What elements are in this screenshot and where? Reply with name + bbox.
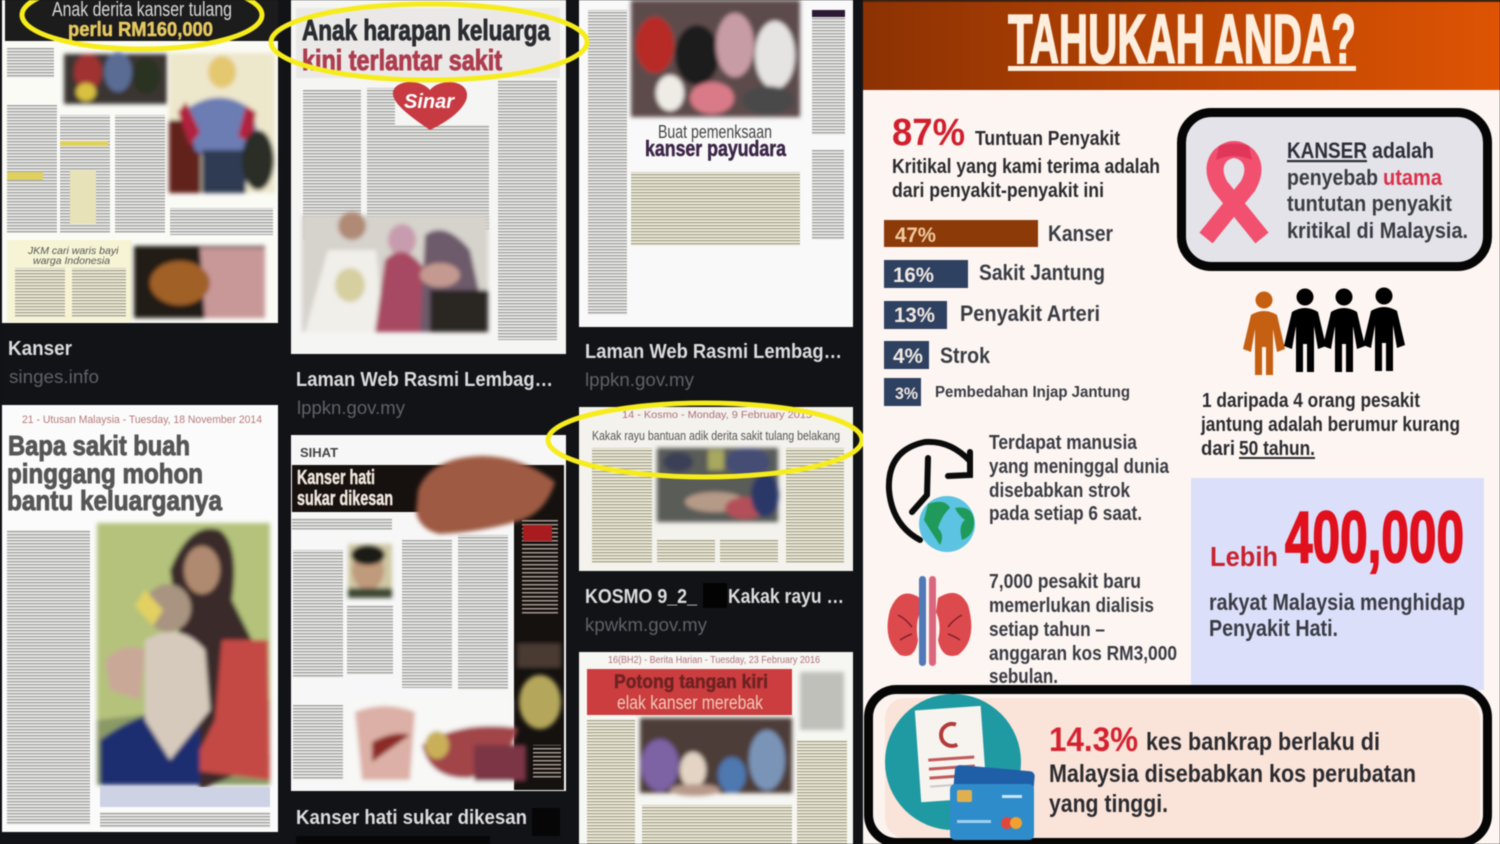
article text columns <box>588 10 845 315</box>
callout: bankruptcy <box>868 690 1488 842</box>
article text columns <box>292 518 508 780</box>
stat: 1 in 4 <box>1200 390 1460 460</box>
text: stroke fact: disebabkan strok <box>989 480 1131 502</box>
bar chart: critical illness claims <box>884 220 1130 406</box>
caption: Kosmo <box>585 583 844 635</box>
headline: kini terlantar sakit <box>302 45 502 77</box>
caption: Kanser <box>8 338 99 387</box>
headline band: sukar dikesan <box>297 488 393 510</box>
article text columns <box>7 48 273 235</box>
callout text: kes bankrap berlaku di <box>1146 728 1380 756</box>
headline: Buat pemenksaan <box>658 122 772 142</box>
callout text <box>1049 721 1416 818</box>
bar: Pembedahan Injap Jantung 3%: Pembedahan Injap Jantung <box>935 384 1130 401</box>
bar: Penyakit Arteri 13%: 13% <box>894 304 935 327</box>
bar: Pembedahan Injap Jantung 3% <box>884 378 1130 406</box>
logo: Sinar heart <box>393 82 467 130</box>
bar: Sakit Jantung 16%: Sakit Jantung <box>979 260 1105 285</box>
caption: Laman Web 2: lppkn.gov.my <box>585 370 694 390</box>
text: stroke fact: pada setiap 6 saat. <box>989 503 1142 525</box>
panel: newspaper card Kanser <box>2 0 278 323</box>
photo: hospital <box>657 448 779 522</box>
stat: 1 in 4: jantung adalah berumur kurang <box>1200 414 1460 436</box>
callout text: penyebab <box>1287 165 1378 190</box>
bar: Strok 4%: 4% <box>893 345 923 368</box>
bar: Kanser 47% <box>884 220 1113 247</box>
article text columns <box>303 80 557 340</box>
photo: family <box>64 52 167 104</box>
bar: Kanser 47%: 47% <box>895 224 936 247</box>
stat: 1 in 4: dari <box>1201 438 1235 460</box>
date line: 14 - Kosmo - Monday, 9 February 2015 <box>622 409 812 421</box>
icon: kidneys <box>888 576 971 666</box>
photo: group <box>631 0 800 117</box>
article text columns <box>592 448 844 563</box>
text: dialysis fact: 7,000 pesakit baru <box>989 571 1141 593</box>
photo caption <box>100 787 270 807</box>
bar: Pembedahan Injap Jantung 3%: 3% <box>895 384 918 403</box>
headline: Bapa sakit buah <box>8 430 190 461</box>
panel: newspaper card Kanser hati <box>291 435 566 791</box>
callout text: KANSER <box>1287 138 1367 163</box>
panel: liver disease stat: Penyakit Hati. <box>1209 615 1338 641</box>
callout text: tuntutan penyakit <box>1287 191 1453 216</box>
bar: Sakit Jantung 16% <box>884 260 1105 288</box>
stat: 87 percent: Tuntuan Penyakit <box>975 128 1120 150</box>
headline band <box>5 0 278 41</box>
headline band <box>292 465 560 512</box>
photo: child <box>169 53 275 193</box>
callout text: Malaysia disebabkan kos perubatan <box>1049 760 1416 788</box>
caption: Laman Web 1: lppkn.gov.my <box>297 398 405 418</box>
bar: Kanser 47%: Kanser <box>1048 221 1113 246</box>
panel: newspaper card Anak harapan <box>291 0 566 354</box>
callout: Kanser penyebab utama <box>1182 112 1488 266</box>
caption: Kosmo: kpwkm.gov.my <box>585 615 707 635</box>
callout text: 14.3% <box>1049 721 1138 759</box>
stat: 1 in 4: 1 daripada 4 orang pesakit <box>1202 390 1420 412</box>
icon: four people <box>1243 288 1405 375</box>
photo: group <box>640 718 792 796</box>
photo: family <box>302 212 488 332</box>
date line: 21 - Utusan Malaysia - Tuesday, 18 November 2014 <box>22 414 262 426</box>
headline band <box>587 669 792 715</box>
headline band: Kanser hati <box>297 467 375 489</box>
photo: portrait <box>348 544 392 598</box>
callout: yellow circle Kosmo <box>548 403 862 477</box>
panel: newspaper card Kosmo <box>579 407 853 571</box>
text: dialysis fact <box>989 571 1177 688</box>
icon: cancer ribbon <box>1206 144 1262 238</box>
caption: Laman Web 2: Laman Web Rasmi Lembag… <box>585 341 842 363</box>
headline: Kakak rayu bantuan adik derita sakit tulang belakang <box>592 429 840 443</box>
stat: 1 in 4: 50 tahun. <box>1239 438 1315 460</box>
bottom section: JKM cari waris bayi <box>27 245 119 257</box>
callout text: yang tinggi. <box>1049 790 1168 818</box>
panel: liver disease stat: Lebih <box>1210 541 1278 572</box>
panel: Tahukah Anda infographic <box>863 0 1500 844</box>
callout: yellow circle RM160,000 <box>22 0 262 49</box>
headline: bantu keluarganya <box>7 485 222 516</box>
icon: clock and globe <box>889 442 975 552</box>
logo: Sinar heart: Sinar <box>404 91 455 113</box>
caption: Kosmo: Kakak rayu … <box>728 586 844 608</box>
panel: newspaper card kanser payudara <box>579 0 853 327</box>
bottom section: warga Indonesia <box>33 255 110 267</box>
bar: Strok 4% <box>884 341 991 369</box>
caption: Kanser hati: Kanser hati sukar dikesan <box>296 807 527 829</box>
illustration: liver <box>416 456 555 534</box>
headline <box>645 122 787 161</box>
bar: Penyakit Arteri 13%: Penyakit Arteri <box>960 301 1100 326</box>
right black column <box>514 465 564 790</box>
bottom section <box>7 240 132 322</box>
callout text: kritikal di Malaysia. <box>1287 218 1468 243</box>
caption: Laman Web 2 <box>585 341 842 390</box>
article text columns <box>587 672 847 844</box>
stat: 87 percent: Kritikal yang kami terima adalah <box>892 156 1160 178</box>
caption: Kosmo: KOSMO 9_2_ <box>585 586 698 608</box>
stat: 87 percent <box>892 112 1160 202</box>
panel: liver disease stat: rakyat Malaysia menghidap <box>1209 589 1465 615</box>
caption: Kanser: Kanser <box>8 338 72 360</box>
caption: Kanser: singes.info <box>9 367 99 387</box>
headline band: elak kanser merebak <box>617 693 763 714</box>
text: dialysis fact: setiap tahun – <box>989 619 1105 641</box>
photo: infant <box>134 246 265 318</box>
icon: medical bill and credit card <box>885 694 1035 840</box>
caption: Kanser hati <box>296 807 560 844</box>
bar: Sakit Jantung 16%: 16% <box>893 264 934 287</box>
headline band: perlu RM160,000 <box>68 19 213 41</box>
caption: Laman Web 1 <box>296 369 553 418</box>
headline <box>7 430 222 516</box>
text: dialysis fact: sebulan. <box>989 666 1058 688</box>
article text column <box>7 530 270 828</box>
photo: mother and child <box>97 523 270 790</box>
stat: 87 percent: dari penyakit-penyakit ini <box>892 180 1104 202</box>
panel: newspaper card Potong tangan <box>579 652 853 844</box>
date line: 16(BH2) - Berita Harian - Tuesday, 23 February 2016 <box>608 654 820 666</box>
text: dialysis fact: anggaran kos RM3,000 <box>989 643 1177 665</box>
callout text: utama <box>1383 165 1443 190</box>
callout text: adalah <box>1372 138 1434 163</box>
headline <box>296 8 560 78</box>
bar: Penyakit Arteri 13% <box>884 301 1100 329</box>
illustration: abdomen and liver <box>347 700 526 785</box>
callout: yellow circle Anak harapan <box>271 4 587 80</box>
stat: 87 percent: 87% <box>892 112 965 154</box>
panel: newspaper card Bapa sakit <box>2 405 278 832</box>
text: stroke fact <box>989 432 1170 525</box>
text: stroke fact: yang meninggal dunia <box>989 456 1170 478</box>
text: dialysis fact: memerlukan dialisis <box>989 595 1154 617</box>
panel: liver disease stat <box>1191 478 1484 690</box>
bar: Strok 4%: Strok <box>940 343 991 368</box>
headline: kanser payudara <box>645 136 787 161</box>
caption: Laman Web 1: Laman Web Rasmi Lembag… <box>296 369 553 391</box>
section label: SIHAT <box>300 445 338 460</box>
headline: pinggang mohon <box>7 458 203 489</box>
callout text <box>1287 138 1468 243</box>
text: stroke fact: Terdapat manusia <box>989 432 1138 454</box>
headline band: Potong tangan kiri <box>614 672 768 693</box>
headline: Anak harapan keluarga <box>302 15 551 47</box>
header band <box>863 0 1500 90</box>
